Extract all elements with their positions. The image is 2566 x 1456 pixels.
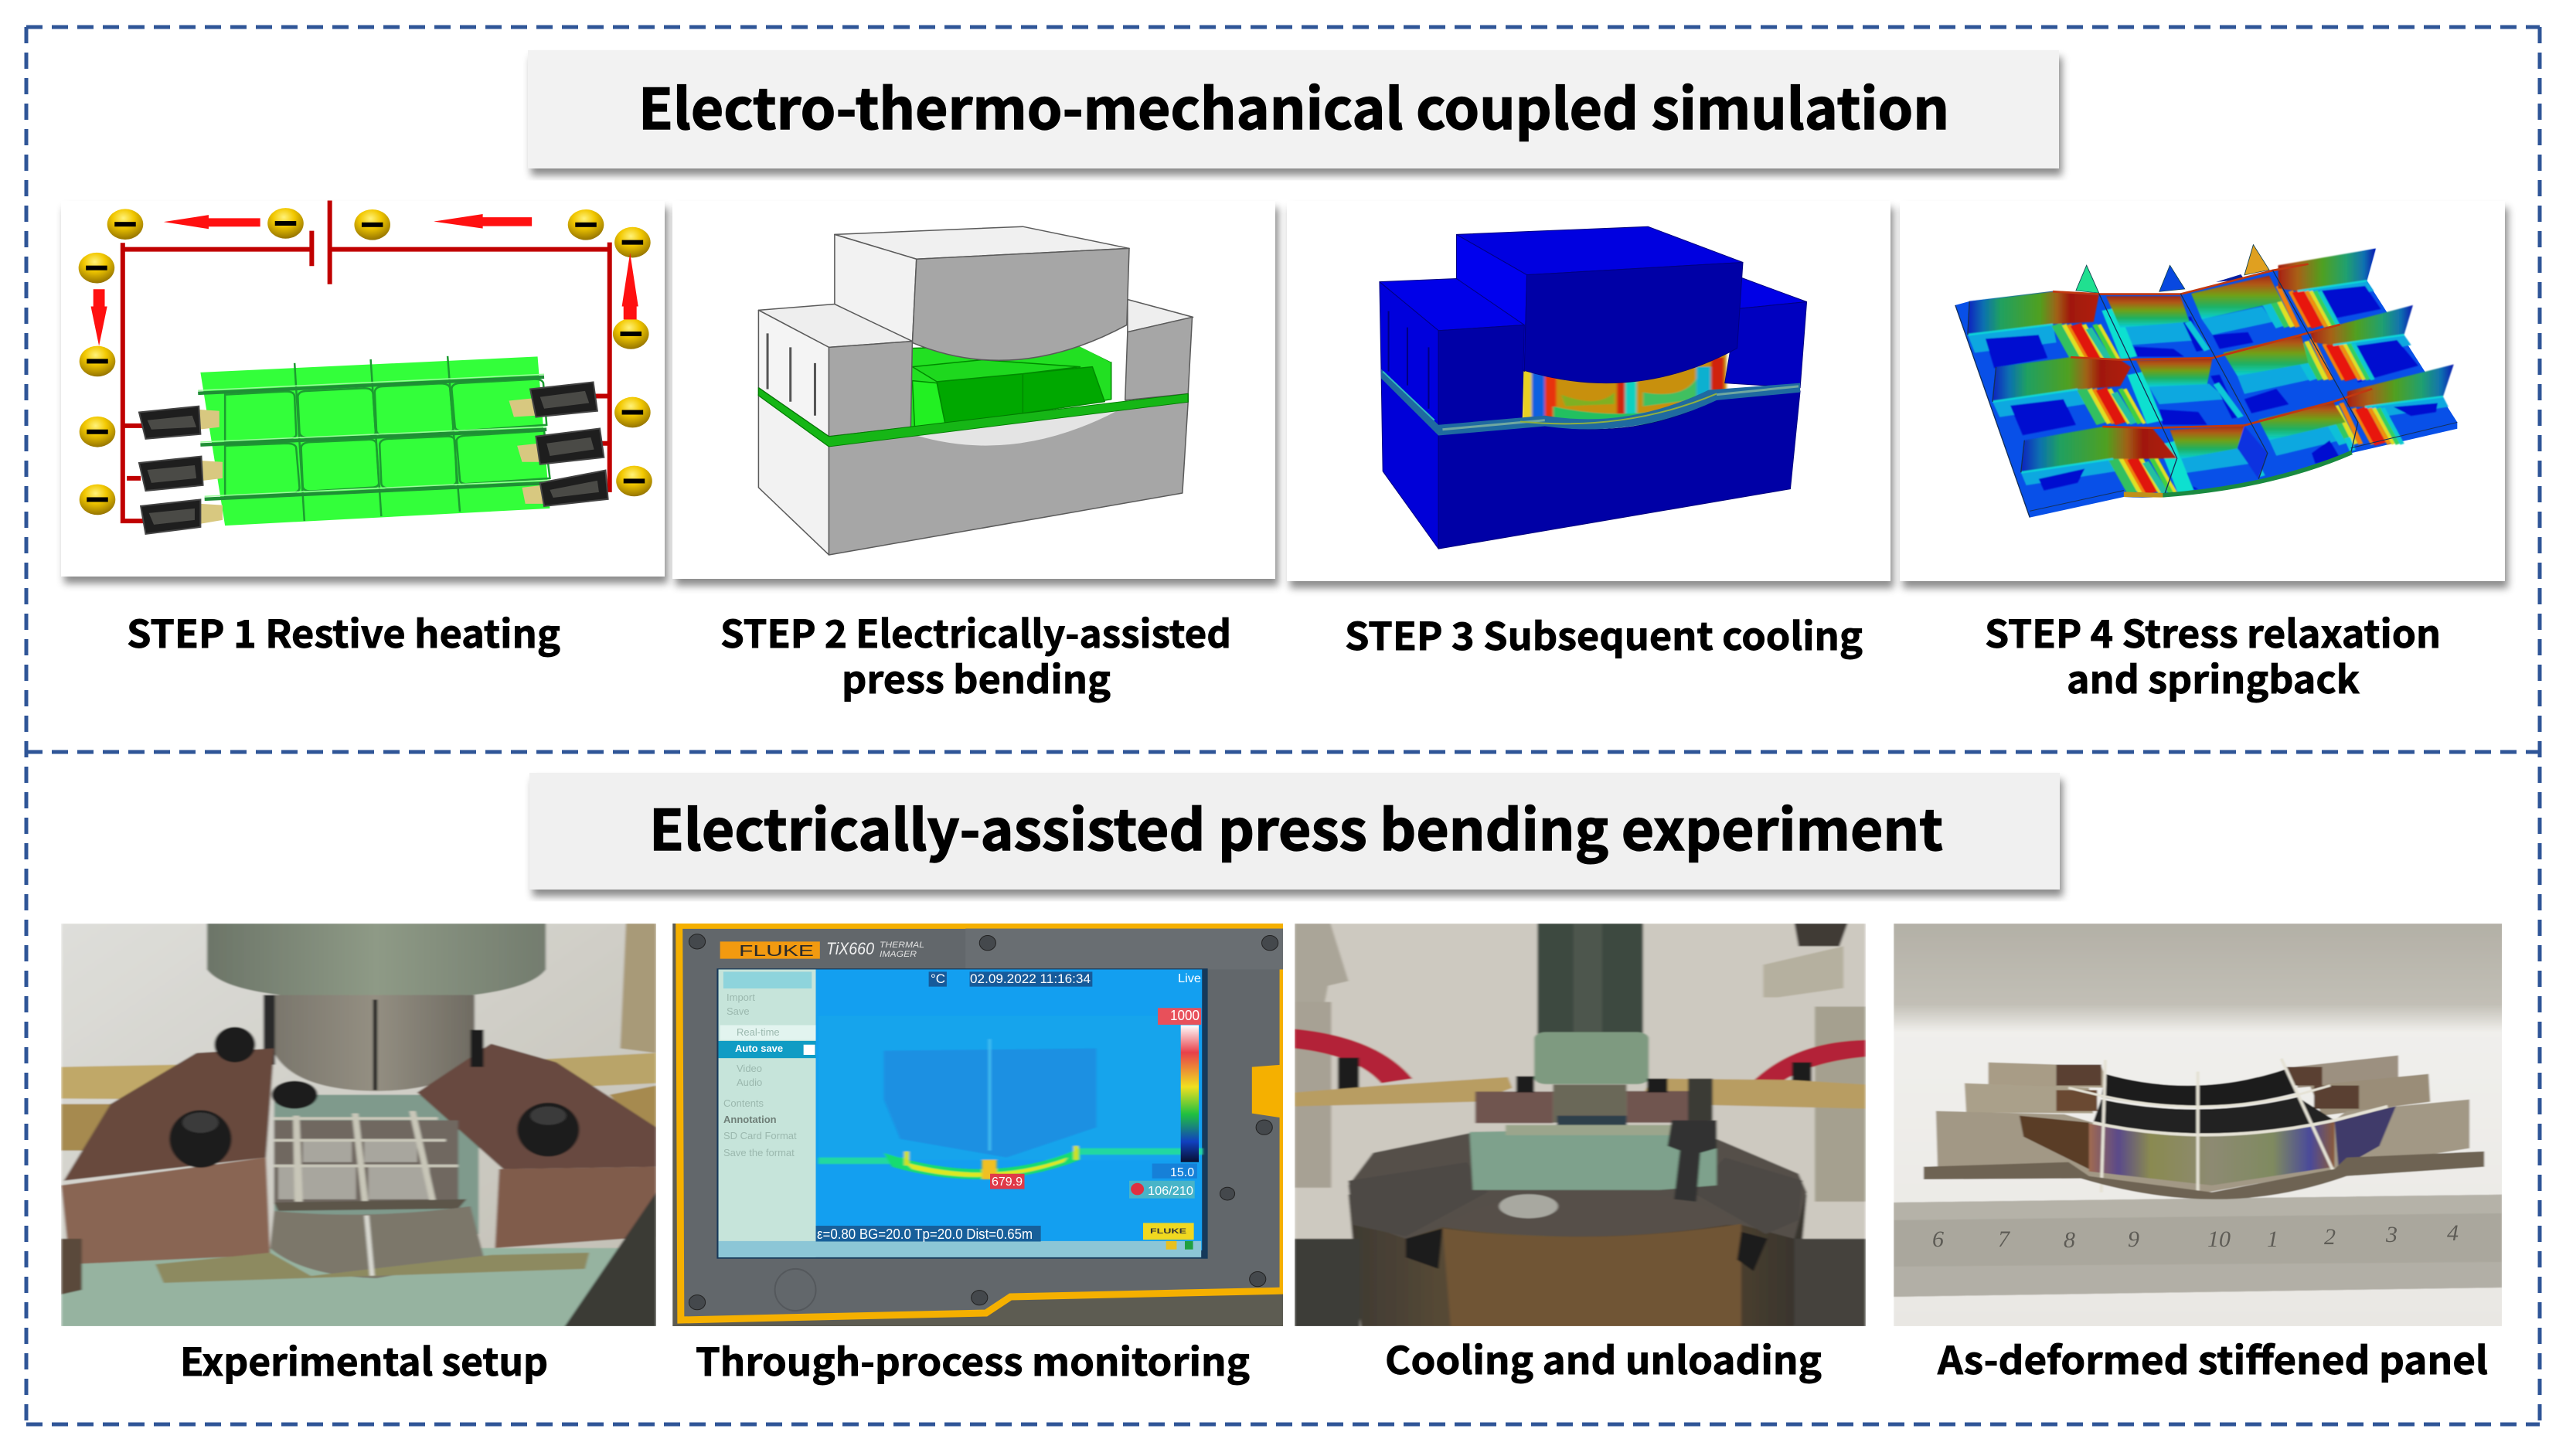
ruler numbers: 2: [2324, 1224, 2336, 1250]
imager labels: 106/210: [1148, 1185, 1193, 1198]
imager labels: THERMAL: [880, 941, 924, 950]
imager labels: ε=0.80 BG=20.0 Tp=20.0 Dist=0.65m: [817, 1226, 1033, 1242]
heading: simulation: [528, 50, 2059, 168]
fins: [1989, 1063, 2109, 1088]
cylinder: [207, 924, 546, 999]
heading: simulation: Electro-thermo-mechanical coupled simulation: [638, 64, 1949, 145]
caption: experimental setup: Experimental setup: [180, 1332, 548, 1387]
copper rods: [1295, 1077, 1512, 1107]
left block: [758, 304, 912, 347]
thermal image: [816, 1039, 1205, 1180]
panel: step 4 springback contour: [1900, 201, 2505, 581]
panel: step 2 press bending: [672, 201, 1275, 579]
dark cells: [2101, 1070, 2298, 1107]
caption: step 2: STEP 2 Electrically-assisted: [720, 604, 1231, 659]
current arrows: [91, 214, 638, 346]
screen: [716, 968, 1208, 1259]
deep blue cells: [1986, 286, 2438, 491]
ruler numbers: 10: [2207, 1226, 2231, 1252]
bottom die: [758, 395, 829, 555]
right block: [417, 1044, 656, 1169]
ribs bright lines: [2068, 1059, 2387, 1192]
imager labels: FLUKE: [1150, 1227, 1186, 1235]
right block: [1128, 300, 1193, 332]
caption: cooling: Cooling and unloading: [1385, 1331, 1822, 1386]
imager labels: Annotation: [723, 1114, 777, 1125]
photo: experimental setup: [61, 924, 656, 1326]
ruler numbers: 3: [2385, 1222, 2398, 1247]
left block: [64, 1049, 274, 1181]
photo: through-process monitoring thermal imager: [672, 924, 1286, 1326]
caption: as-deformed: As-deformed stiffened panel: [1937, 1331, 2488, 1386]
ruler numbers: 4: [2447, 1220, 2459, 1246]
panel: step 3 subsequent cooling: [1287, 201, 1890, 581]
imager body: [679, 925, 1283, 1320]
green stiffened panel inside die: [910, 344, 1111, 432]
imager labels: Auto save: [735, 1043, 783, 1054]
imager labels: Save the format: [723, 1147, 795, 1158]
imager labels: Live: [1178, 972, 1201, 985]
caption: step 4: and springback: [2067, 650, 2360, 705]
imager labels: TiX660: [826, 939, 875, 958]
panel: step 1 resistive heating: [61, 201, 665, 577]
imager labels: Contents: [723, 1097, 764, 1109]
green sheet: [758, 388, 1188, 447]
ruler numbers: 8: [2064, 1227, 2075, 1253]
heading: experiment: Electrically-assisted press bending experiment: [649, 785, 1943, 866]
electrons: [79, 208, 652, 515]
wall foot lines: [1968, 281, 2443, 472]
imager labels: Real-time: [737, 1026, 780, 1038]
rib tips: [2076, 245, 2269, 293]
imager labels: Audio: [737, 1077, 762, 1088]
punch: [835, 226, 1129, 259]
green block: [1534, 1032, 1649, 1084]
bolt: [1688, 1079, 1713, 1121]
heading: experiment: [529, 773, 2060, 890]
imager labels: IMAGER: [880, 950, 917, 959]
caption: monitoring: Through-process monitoring: [696, 1332, 1250, 1387]
red clamps: [1295, 1029, 1412, 1083]
imager labels: [723, 939, 1201, 1242]
imager labels: FLUKE: [739, 943, 814, 960]
caption: step 1: STEP 1 Restive heating: [127, 604, 560, 659]
chuck: [1349, 1195, 1807, 1326]
ram column: [1537, 924, 1643, 1035]
cyan halos below walls: [1968, 281, 2449, 485]
ruler: [1894, 1213, 2502, 1267]
ruler numbers: 1: [2267, 1226, 2278, 1252]
transverse walls: [1968, 249, 2454, 479]
circuit: [123, 201, 610, 521]
imager labels: 15.0: [1170, 1166, 1194, 1179]
caption: step 2: [720, 604, 1231, 705]
caption: step 4: STEP 4 Stress relaxation: [1985, 604, 2441, 659]
plate body: [1955, 249, 2457, 518]
imager labels: 679.9: [992, 1175, 1023, 1189]
ruler numbers: 7: [1998, 1226, 2011, 1252]
imager labels: 1000: [1170, 1008, 1200, 1023]
caption: step 4: [1985, 604, 2441, 705]
caption: step 3: STEP 3 Subsequent cooling: [1345, 607, 1863, 662]
imager labels: °C: [931, 971, 945, 986]
ruler numbers: 6: [1932, 1226, 1944, 1252]
punch: [274, 995, 475, 1091]
ruler numbers: 9: [2128, 1226, 2139, 1252]
curved bottom edge: [2163, 451, 2353, 498]
rib crest and edge lines: [2053, 264, 2372, 428]
imager labels: Save: [727, 1005, 750, 1017]
imager labels: Import: [727, 992, 755, 1003]
imager labels: 02.09.2022 11:16:34: [970, 971, 1091, 986]
brackets: [1295, 924, 1866, 1202]
bolts: [169, 1027, 580, 1168]
ruler numbers: [1932, 1220, 2459, 1253]
base flange: [1924, 1152, 2484, 1199]
front rib: [1936, 1100, 2469, 1192]
green base: [1469, 1128, 1717, 1190]
lower die: [270, 1206, 485, 1278]
tooling: [1553, 1084, 1627, 1123]
caption: step 2: press bending: [842, 650, 1111, 705]
photo: as-deformed stiffened panel: [1894, 924, 2503, 1326]
clamps: [139, 382, 608, 534]
hot strips along longitudinal ribs: [2057, 286, 2402, 493]
imager labels: SD Card Format: [723, 1130, 797, 1141]
stiffened green panel: [198, 356, 550, 526]
centre stiffened panel: [274, 1121, 458, 1204]
hot sheet contour: [1522, 353, 1727, 426]
imager labels: Video: [737, 1063, 762, 1074]
photo: cooling and unloading: [1295, 924, 1866, 1326]
clamps: [61, 1065, 182, 1100]
